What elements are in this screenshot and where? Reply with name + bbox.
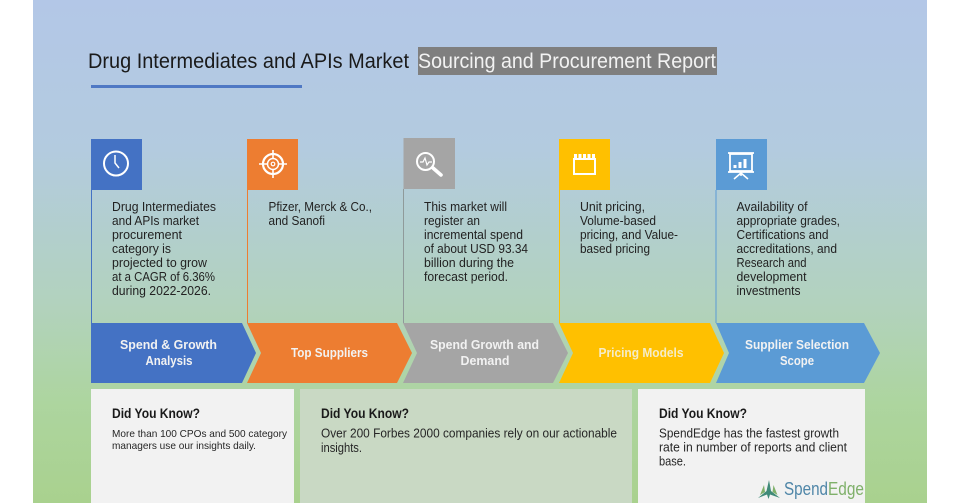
text: supplier selection: appropriate grades,: [736, 214, 840, 228]
arrow: supplier selection scope: [716, 323, 880, 383]
card: did you know, left: Did You Know?: [112, 406, 200, 421]
card: did you know, middle: Did You Know?: [321, 406, 409, 421]
arrow: spend growth and demand: Demand: [460, 353, 510, 368]
text: spend growth: incremental spend: [424, 228, 523, 242]
text: spend and growth: [112, 200, 216, 298]
text: top suppliers: Pfizer, Merck & Co.,: [268, 200, 372, 214]
logo: SpendEdge: Edge: [828, 479, 864, 499]
card: did you know, right: rate in number of reports and client: [659, 440, 848, 454]
arrow: pricing models: Pricing Models: [598, 345, 684, 360]
icon: clock: [91, 139, 142, 190]
icon: magnifier: [404, 138, 455, 189]
panel: spend growth and demand: [403, 138, 568, 383]
logo: SpendEdge: Spend: [784, 479, 828, 499]
card: did you know, left: [91, 389, 294, 503]
panel: spend and growth analysis: [91, 139, 256, 383]
text: spend and growth: projected to grow: [112, 256, 208, 270]
text: spend and growth: and APIs market: [112, 214, 199, 228]
text: spend growth: forecast period.: [424, 270, 508, 284]
card: did you know, right: Did You Know?: [659, 406, 747, 421]
arrow: top suppliers: Top Suppliers: [291, 345, 368, 360]
text: pricing models: Volume-based: [580, 214, 656, 228]
card: did you know, middle: insights.: [321, 441, 362, 455]
arrow: spend and growth analysis: Analysis: [146, 353, 192, 368]
card: did you know, right: [638, 389, 865, 503]
arrow: supplier selection scope: Scope: [780, 353, 814, 368]
text: spend and growth: procurement: [112, 228, 183, 242]
text: spend growth: billion during the: [424, 256, 514, 270]
title: Drug Intermediates and APIs Market: [88, 50, 409, 73]
icon: calendar: [559, 139, 610, 190]
title: [88, 47, 717, 88]
card: did you know, left: More than 100 CPOs and 500 category: [112, 428, 288, 440]
card: did you know, middle: [300, 389, 632, 503]
card: did you know, middle: Over 200 Forbes 2000 companies rely on our actionable: [321, 426, 617, 440]
arrow: spend growth and demand: [403, 323, 568, 383]
text: top suppliers: and Sanofi: [268, 214, 325, 228]
arrow: spend and growth analysis: [91, 323, 256, 383]
text: supplier selection: Research and: [736, 256, 807, 270]
text: spend and growth: category is: [112, 242, 171, 256]
panel: supplier selection scope: [716, 139, 880, 383]
text: spend growth: This market will: [424, 200, 507, 214]
arrow: pricing models: [559, 323, 724, 383]
card: did you know, right: base.: [659, 454, 686, 468]
text: pricing models: based pricing: [580, 242, 650, 256]
text: pricing models: Unit pricing,: [580, 200, 645, 214]
text: supplier selection: development: [736, 270, 807, 284]
text: spend growth: [424, 200, 528, 284]
text: supplier selection: accreditations, and: [736, 242, 837, 256]
card: did you know, left: managers use our insights daily.: [112, 440, 256, 452]
arrow: spend growth and demand: Spend Growth and: [430, 337, 539, 352]
arrow: supplier selection scope: Supplier Selection: [745, 337, 849, 352]
arrow: spend and growth analysis: Spend & Growth: [120, 337, 217, 352]
text: pricing models: pricing, and Value-: [580, 228, 678, 242]
icon: target: [247, 139, 298, 190]
logo: SpendEdge: [758, 479, 864, 499]
icon: presentation board: [716, 139, 767, 190]
text: pricing models: [580, 200, 678, 256]
panel: pricing models: [559, 139, 724, 383]
text: spend and growth: during 2022-2026.: [112, 284, 211, 298]
text: spend growth: of about USD 93.34: [424, 242, 528, 256]
text: supplier selection: Certifications and: [736, 228, 829, 242]
text: supplier selection: [736, 200, 840, 298]
card: did you know, right: SpendEdge has the fastest growth: [659, 426, 839, 440]
text: spend and growth: at a CAGR of 6.36%: [112, 270, 215, 284]
text: top suppliers: [268, 200, 372, 228]
panel: top suppliers: [247, 139, 412, 383]
text: supplier selection: Availability of: [736, 200, 808, 214]
text: spend and growth: Drug Intermediates: [112, 200, 216, 214]
text: supplier selection: investments: [736, 284, 800, 298]
title: Sourcing and Procurement Report: [418, 50, 716, 73]
text: spend growth: register an: [424, 214, 480, 228]
arrow: top suppliers: [247, 323, 412, 383]
